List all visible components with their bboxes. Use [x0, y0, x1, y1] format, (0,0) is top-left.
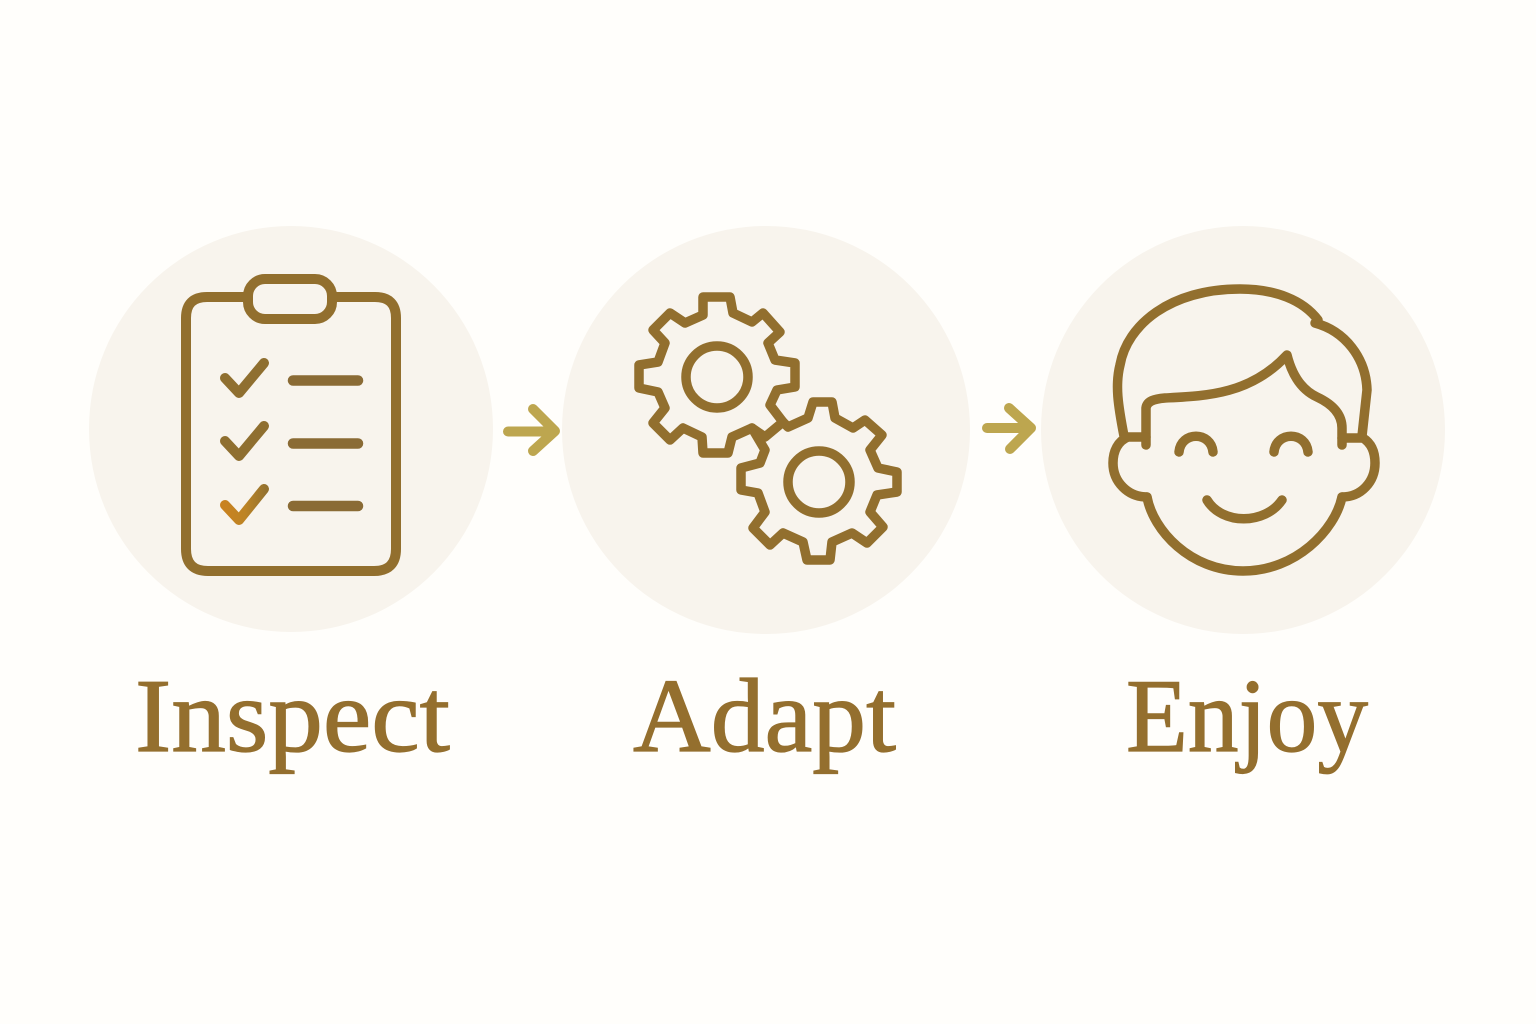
heading: Enjoy: Enjoy [1126, 657, 1368, 774]
icon: upper gear [639, 297, 795, 453]
icon: gears [639, 297, 897, 560]
heading: Inspect: Inspect [135, 657, 450, 774]
panel: inspect circle [89, 226, 493, 632]
panel: enjoy circle [1041, 226, 1445, 634]
icon: lower gear [741, 402, 897, 560]
arrow: inspect to adapt [508, 409, 555, 451]
heading: Adapt: Adapt [633, 657, 896, 774]
arrow: adapt to enjoy [987, 408, 1031, 449]
panel: adapt circle [562, 226, 970, 634]
icon: smiling face [1113, 289, 1375, 571]
icon: clipboard checklist [186, 279, 396, 571]
